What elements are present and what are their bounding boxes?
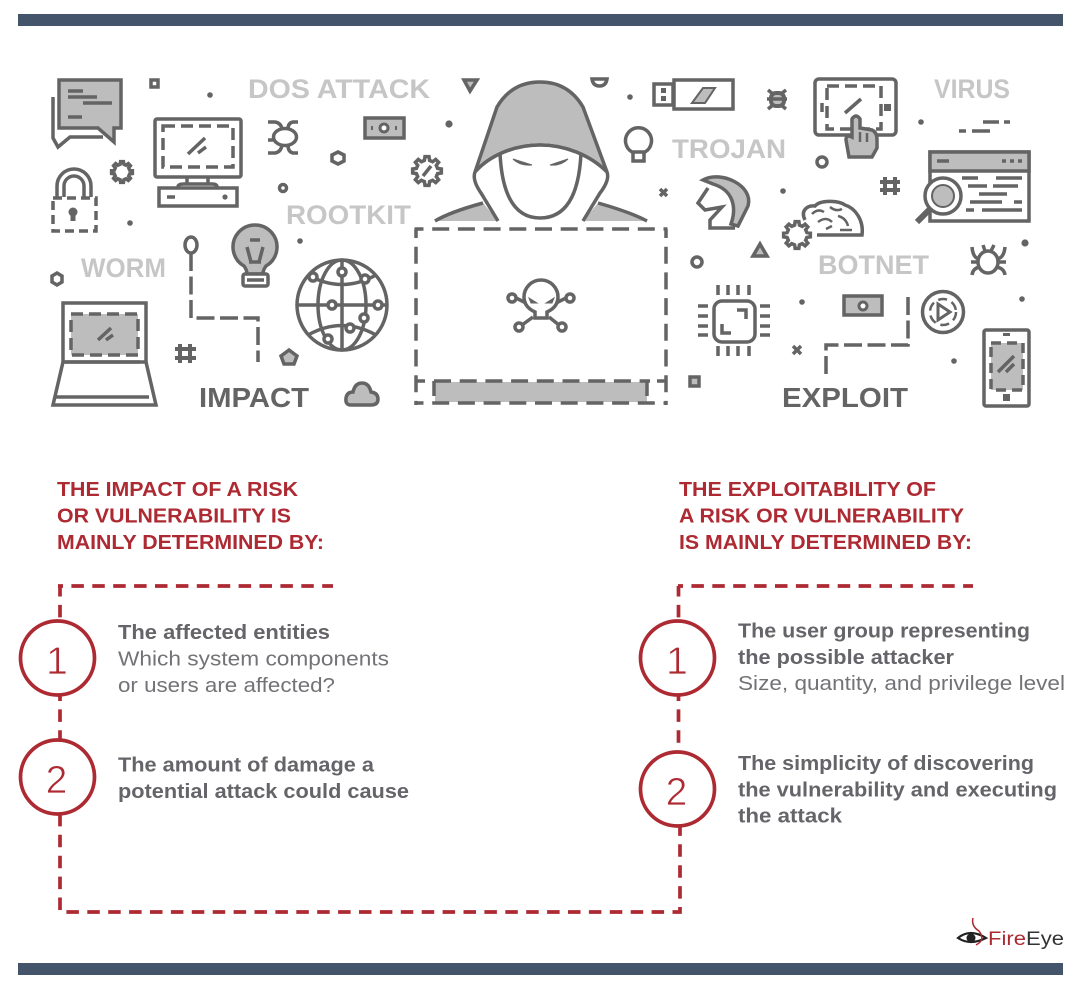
- heading: exploitability: A RISK OR VULNERABILITY: [679, 506, 965, 528]
- step circle: impact 2: 2: [46, 759, 67, 802]
- step text: user group: [738, 620, 1065, 695]
- label: VIRUS: VIRUS: [934, 74, 1010, 104]
- icon: padlock: [53, 169, 96, 231]
- icon: circuit chip: [698, 285, 770, 356]
- label: IMPACT: IMPACT: [199, 382, 309, 413]
- icon: play button: [922, 292, 964, 332]
- label: BOTNET: BOTNET: [818, 250, 930, 280]
- heading: exploitability: IS MAINLY DETERMINED BY:: [679, 532, 972, 554]
- icon: banknote: [844, 296, 882, 315]
- icon: dot: [918, 119, 924, 125]
- step text: amount of damage: potential attack could cause: [118, 781, 409, 803]
- hacker lower hood: [474, 145, 608, 221]
- step text: simplicity: The simplicity of discovering: [738, 753, 1034, 775]
- icon: outlined bulb: [626, 128, 652, 161]
- step text: simplicity: [738, 753, 1057, 828]
- icon: USB stick: [654, 80, 733, 109]
- step text: affected entities: Which system components: [118, 648, 389, 670]
- step text: user group: Size, quantity, and privilege level: [738, 673, 1065, 695]
- step text: simplicity: the vulnerability and executing: [738, 780, 1057, 802]
- icon: dot: [627, 94, 633, 100]
- icon: knight horse: [698, 177, 749, 228]
- top bar: [18, 14, 1063, 26]
- icon: x mark: [660, 189, 667, 196]
- red dashed connector: [58, 586, 973, 912]
- icon: hexagon: [332, 152, 344, 164]
- label: ROOTKIT: ROOTKIT: [286, 200, 412, 230]
- icon: chat bubbles: [53, 80, 121, 147]
- step text: user group: the possible attacker: [738, 647, 954, 669]
- icon: dashed connector left: [185, 237, 258, 362]
- logo: FireEye: [958, 918, 1064, 950]
- step text: amount of damage: [118, 754, 409, 803]
- icon: small bug: [767, 90, 787, 109]
- icon: filled light bulb: [233, 225, 277, 286]
- heading: impact: OR VULNERABILITY IS: [57, 506, 291, 528]
- label: WORM: WORM: [81, 253, 166, 283]
- label: EXPLOIT: EXPLOIT: [782, 382, 908, 413]
- logo: FireEye: Fire Eye: [988, 929, 1064, 950]
- icon: ring: [692, 257, 702, 267]
- icon: brain with gear: [784, 201, 862, 248]
- step circle: impact 1: 1: [46, 640, 68, 683]
- icon: half circle: [592, 79, 607, 86]
- hacker shoulders: [435, 203, 647, 221]
- icon: dot: [127, 220, 133, 226]
- icon: pentagon: [281, 350, 297, 364]
- step text: affected entities: [118, 622, 389, 697]
- icon: triangle up: [753, 244, 767, 256]
- step text: amount of damage: The amount of damage a: [118, 754, 375, 776]
- hacker laptop: [414, 229, 668, 405]
- icon: network globe: [297, 260, 387, 350]
- icon: dot: [1019, 296, 1025, 302]
- icon: bug: [268, 122, 298, 153]
- icon: x mark: [793, 346, 801, 354]
- icon: dot: [297, 238, 303, 244]
- dashes: [959, 122, 1010, 131]
- icon: dot: [207, 92, 213, 98]
- step circle: exploitability 1: [640, 621, 714, 695]
- icon: laptop: [53, 303, 156, 405]
- icon: ring: [280, 184, 286, 192]
- label: TROJAN: TROJAN: [672, 134, 786, 164]
- label: DOS ATTACK: DOS ATTACK: [248, 74, 431, 104]
- icon: ring: [817, 157, 827, 167]
- icon: cloud: [346, 383, 378, 405]
- hacker hood outline: [475, 82, 607, 172]
- icon: dot: [780, 188, 786, 194]
- hacker figure: [435, 82, 647, 221]
- icon: large bug: [971, 245, 1006, 275]
- icon: hexagon: [52, 273, 62, 285]
- heading: impact: MAINLY DETERMINED BY:: [57, 532, 324, 554]
- step text: affected entities: or users are affected?: [118, 675, 335, 697]
- step text: user group: The user group representing: [738, 620, 1030, 642]
- step text: simplicity: the attack: [738, 806, 843, 828]
- icon: desktop computer: [155, 119, 241, 206]
- icon: skull with nodes: [508, 280, 574, 331]
- icon: smartphone: [984, 330, 1029, 406]
- icon: square: [690, 377, 699, 386]
- step circle: exploitability 2: 2: [666, 771, 687, 814]
- icon: gear with slash: [413, 157, 441, 185]
- icon: small square: [151, 80, 158, 87]
- icon: triangle down: [464, 80, 477, 91]
- bottom bar: [18, 963, 1063, 975]
- icon: tablet with hand: [815, 79, 896, 157]
- icon: star: [445, 120, 453, 128]
- icon: star: [1021, 239, 1029, 247]
- icon: hash left: [175, 344, 196, 363]
- hacker eyes: [513, 159, 568, 165]
- step circle: impact 2: [20, 740, 94, 814]
- step circle: exploitability 2: [640, 752, 714, 826]
- icon: gear left: [112, 162, 132, 182]
- heading: impact: THE IMPACT OF A RISK: [57, 479, 299, 501]
- heading: impact: [57, 479, 324, 554]
- step circle: impact 1: [20, 621, 94, 695]
- hacker face: [500, 153, 581, 218]
- icon: hash right: [880, 177, 900, 195]
- icon: dashed connector right: [826, 297, 908, 375]
- icon: dot: [951, 358, 957, 364]
- icon: banknote: [365, 118, 404, 138]
- heading: exploitability: THE EXPLOITABILITY OF: [679, 479, 936, 501]
- icon: dot: [799, 299, 805, 305]
- step text: affected entities: The affected entities: [118, 622, 330, 644]
- step circle: exploitability 1: 1: [666, 640, 688, 683]
- heading: exploitability: [679, 479, 972, 554]
- icon: browser window with magnifier: [917, 152, 1029, 222]
